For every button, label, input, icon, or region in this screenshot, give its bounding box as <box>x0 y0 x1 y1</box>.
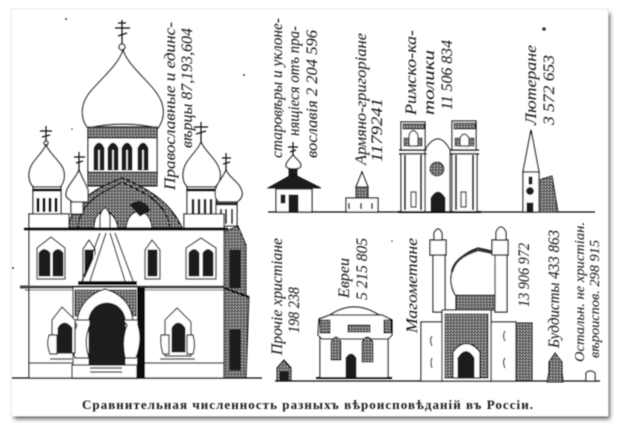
label: Muslims: Магометане <box>404 238 421 334</box>
label: Muslims <box>404 238 533 334</box>
label: Roman Catholics <box>403 30 456 116</box>
label: Armenian Gregorians: 1179241 <box>369 98 386 162</box>
label: Lutherans: Лютеране <box>523 45 540 126</box>
label: Old believers <box>269 18 321 158</box>
label: Lutherans <box>523 45 558 126</box>
right side wall <box>224 226 249 378</box>
label: Jews <box>336 238 371 300</box>
icon: Roman Catholic church <box>398 121 481 212</box>
parapets over cornice <box>24 214 228 229</box>
label: Jews: 5 215 805 <box>354 238 371 300</box>
icon: Lutheran church <box>523 130 558 212</box>
icon: Armenian church <box>346 172 378 212</box>
kokoshnik arches <box>68 178 182 228</box>
lower windows <box>48 307 195 359</box>
right small dome <box>215 153 242 226</box>
label: Old believers: нящіеся отъ пра- <box>286 26 303 136</box>
upper windows <box>37 237 216 280</box>
caption: Сравнительная численность разныхъ вѣроисповѣданій въ Россіи. <box>82 397 533 412</box>
label: Jews: Евреи <box>336 258 353 299</box>
icon: other Christians chapel <box>277 360 291 381</box>
main dome with cross <box>82 20 163 128</box>
label: Lutherans: 3 572 653 <box>541 55 558 126</box>
label: other Christians <box>269 238 303 356</box>
print specks <box>12 18 546 269</box>
label: Muslims: 13 906 972 <box>516 243 533 307</box>
label: other non-Christians <box>573 222 603 362</box>
label: Orthodox: Православные и единс- <box>162 22 179 191</box>
label: Armenian Gregorians: Армяно-григоріане <box>353 33 370 166</box>
left small dome <box>66 152 88 214</box>
label: Roman Catholics: толики <box>421 50 438 115</box>
label: Orthodox: вѣрцы 87,193,604 <box>179 28 196 148</box>
label: other Christians: 198 238 <box>286 287 303 333</box>
label: other non-Christians: вѣроиспов. 298 915 <box>588 240 603 358</box>
ground lines <box>12 212 600 381</box>
label: other Christians: Прочіе христіане <box>269 238 286 356</box>
label: Armenian Gregorians <box>353 33 386 166</box>
main wall <box>20 230 224 378</box>
left large dome <box>29 126 64 214</box>
right large dome <box>183 122 220 216</box>
label: Orthodox <box>162 22 196 191</box>
portal with tent gable <box>72 233 145 378</box>
label: other non-Christians: Остальн. не христіан. <box>573 222 588 362</box>
label: Roman Catholics: Римско-ка- <box>403 30 420 116</box>
icon: Orthodox cathedral <box>20 20 249 378</box>
label: Old believers: вославія 2 204 596 <box>304 30 321 158</box>
central drum with arched windows <box>88 127 157 186</box>
label: Buddhists: Буддисты 433 863 <box>546 230 563 349</box>
label: Roman Catholics: 11 506 834 <box>439 40 456 110</box>
icon: synagogue <box>316 307 392 378</box>
icon: Buddhist temple <box>547 353 563 382</box>
icon: mosque <box>421 227 532 381</box>
icon: old believers chapel <box>268 142 321 212</box>
label: Old believers: старовѣры и уклоне- <box>269 18 286 158</box>
icon: other non-Christian shrine <box>586 371 595 381</box>
